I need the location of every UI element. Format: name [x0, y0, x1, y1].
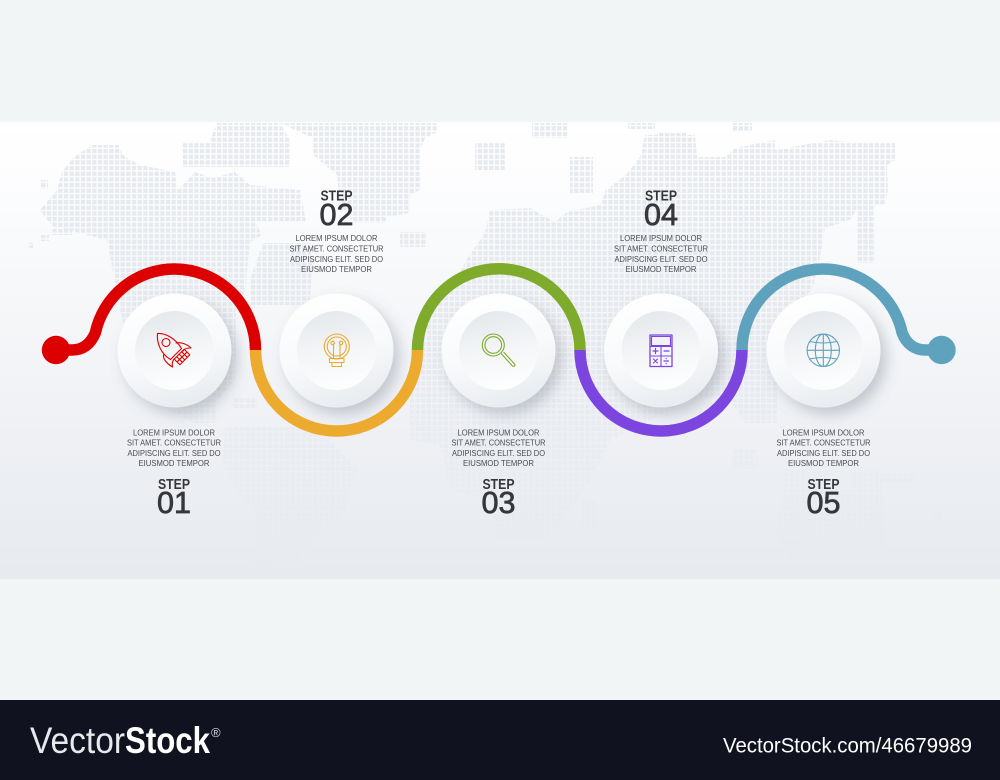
panel: infographic background — [0, 122, 1000, 579]
connector: orange segment — [256, 350, 418, 431]
step 4 description: EIUSMOD TEMPOR — [626, 264, 696, 274]
step 2 description: ADIPISCING ELIT. SED DO — [290, 254, 383, 264]
step 4 description — [614, 233, 708, 274]
icon: light bulb — [324, 334, 349, 366]
connector: purple segment — [580, 350, 742, 431]
icon: globe — [807, 334, 840, 366]
step 5 description: EIUSMOD TEMPOR — [788, 458, 859, 468]
step 4 description: LOREM IPSUM DOLOR — [620, 233, 702, 243]
step 1 description: SIT AMET. CONSECTETUR — [127, 438, 221, 448]
step 5 description: SIT AMET. CONSECTETUR — [776, 438, 870, 448]
step 3 label: STEP — [482, 477, 515, 493]
step 3 description — [452, 428, 546, 468]
step 2 disc — [280, 294, 394, 408]
step 3 description: LOREM IPSUM DOLOR — [458, 428, 540, 438]
step 3 description: SIT AMET. CONSECTETUR — [452, 438, 546, 448]
footer bar — [0, 700, 1000, 780]
step 4 label: STEP — [645, 189, 677, 205]
step 2 description: LOREM IPSUM DOLOR — [296, 233, 378, 243]
footer logo: Stock — [125, 720, 210, 761]
step 1 description: LOREM IPSUM DOLOR — [133, 428, 215, 438]
step 2 description — [290, 233, 384, 274]
step 5 disc — [766, 294, 880, 408]
step 4 label: 04 — [644, 198, 678, 232]
step 1 description — [127, 428, 221, 468]
step 5 label: STEP — [808, 477, 840, 493]
icon: calculator — [650, 335, 672, 366]
step 5 description: ADIPISCING ELIT. SED DO — [777, 448, 870, 458]
icon: magnifying glass — [482, 334, 515, 366]
step 1 label: STEP — [158, 477, 190, 493]
step 2 label: 02 — [320, 198, 354, 232]
step 2 label: STEP — [320, 189, 353, 205]
step 5 description — [776, 428, 870, 468]
connector: green segment — [418, 269, 580, 350]
dotted world map — [28, 123, 895, 402]
footer logo: ® — [211, 725, 221, 740]
step 5 label: 05 — [806, 486, 840, 520]
footer logo: Vector — [30, 720, 125, 761]
step 5 description: LOREM IPSUM DOLOR — [782, 428, 864, 438]
footer logo — [30, 720, 221, 761]
step 1 description: EIUSMOD TEMPOR — [138, 458, 210, 468]
step 3 description: EIUSMOD TEMPOR — [463, 458, 534, 468]
step 2 description: EIUSMOD TEMPOR — [301, 264, 372, 274]
step 1 description: ADIPISCING ELIT. SED DO — [128, 448, 221, 458]
icon: rocket — [157, 333, 191, 367]
step 1 label: 01 — [157, 486, 191, 520]
step 3 label: 03 — [482, 486, 516, 520]
connector: red segment with start dot — [42, 269, 255, 364]
step 4 disc — [604, 294, 718, 408]
step 1 disc — [118, 294, 232, 408]
footer image id: VectorStock.com/46679989 — [723, 734, 972, 758]
step 3 description: ADIPISCING ELIT. SED DO — [452, 448, 545, 458]
step 3 disc — [442, 294, 556, 408]
step 4 description: SIT AMET. CONSECTETUR — [614, 244, 708, 254]
step 2 description: SIT AMET. CONSECTETUR — [290, 244, 384, 254]
step 4 description: ADIPISCING ELIT. SED DO — [614, 254, 708, 264]
connector: blue segment with end dot — [742, 269, 956, 364]
